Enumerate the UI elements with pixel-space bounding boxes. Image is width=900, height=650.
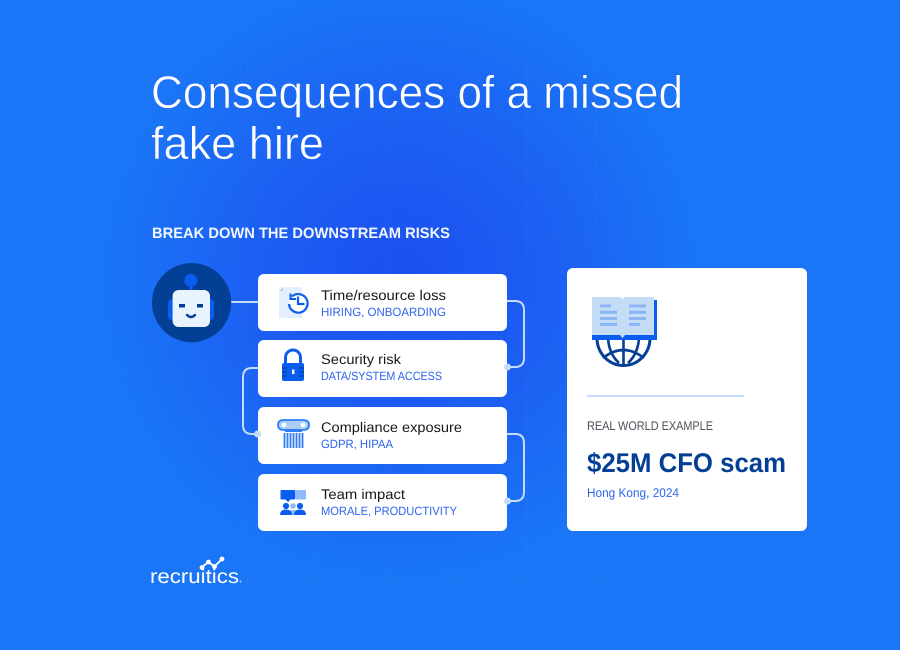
panel: real world example [567, 268, 807, 531]
icon: padlock [282, 350, 304, 381]
card: team impact: Team impact [321, 486, 405, 502]
card: compliance exposure: Compliance exposure [321, 419, 462, 435]
title: Consequences of a missed [151, 66, 683, 118]
connector dot: compliance [254, 430, 261, 438]
connector dot: team [504, 498, 511, 504]
connector: security to compliance [243, 368, 258, 434]
card: security risk [258, 340, 507, 397]
logo: Recruitics [150, 557, 242, 588]
panel: real world example: $25M CFO scam [587, 448, 786, 478]
icon: open book on globe [592, 297, 657, 366]
connector dot: security [504, 364, 511, 370]
connector: compliance to team [507, 434, 524, 501]
title [151, 66, 683, 169]
card: team impact: MORALE, PRODUCTIVITY [321, 504, 457, 518]
connector: time loss to security [507, 301, 524, 367]
card: time/resource loss: HIRING, ONBOARDING [321, 305, 446, 319]
divider [587, 395, 744, 397]
card: compliance exposure: GDPR, HIPAA [321, 437, 393, 451]
icon: robot [152, 263, 231, 342]
panel: real world example: Hong Kong, 2024 [587, 486, 679, 500]
card: time/resource loss: Time/resource loss [321, 287, 446, 303]
logo: Recruitics: recruitics [150, 566, 239, 588]
card: compliance exposure [258, 407, 507, 464]
panel: real world example: REAL WORLD EXAMPLE [587, 419, 713, 433]
card: security risk: Security risk [321, 351, 402, 367]
card: security risk: DATA/SYSTEM ACCESS [321, 369, 442, 383]
subheading: BREAK DOWN THE DOWNSTREAM RISKS [152, 225, 450, 242]
title: fake hire [151, 117, 324, 169]
icon: document clock [279, 287, 308, 318]
card: time/resource loss [258, 274, 507, 331]
connector: robot to first card [231, 301, 258, 303]
icon: column [278, 420, 309, 448]
icon: team with speech bubbles [280, 490, 306, 515]
card: team impact [258, 474, 507, 531]
